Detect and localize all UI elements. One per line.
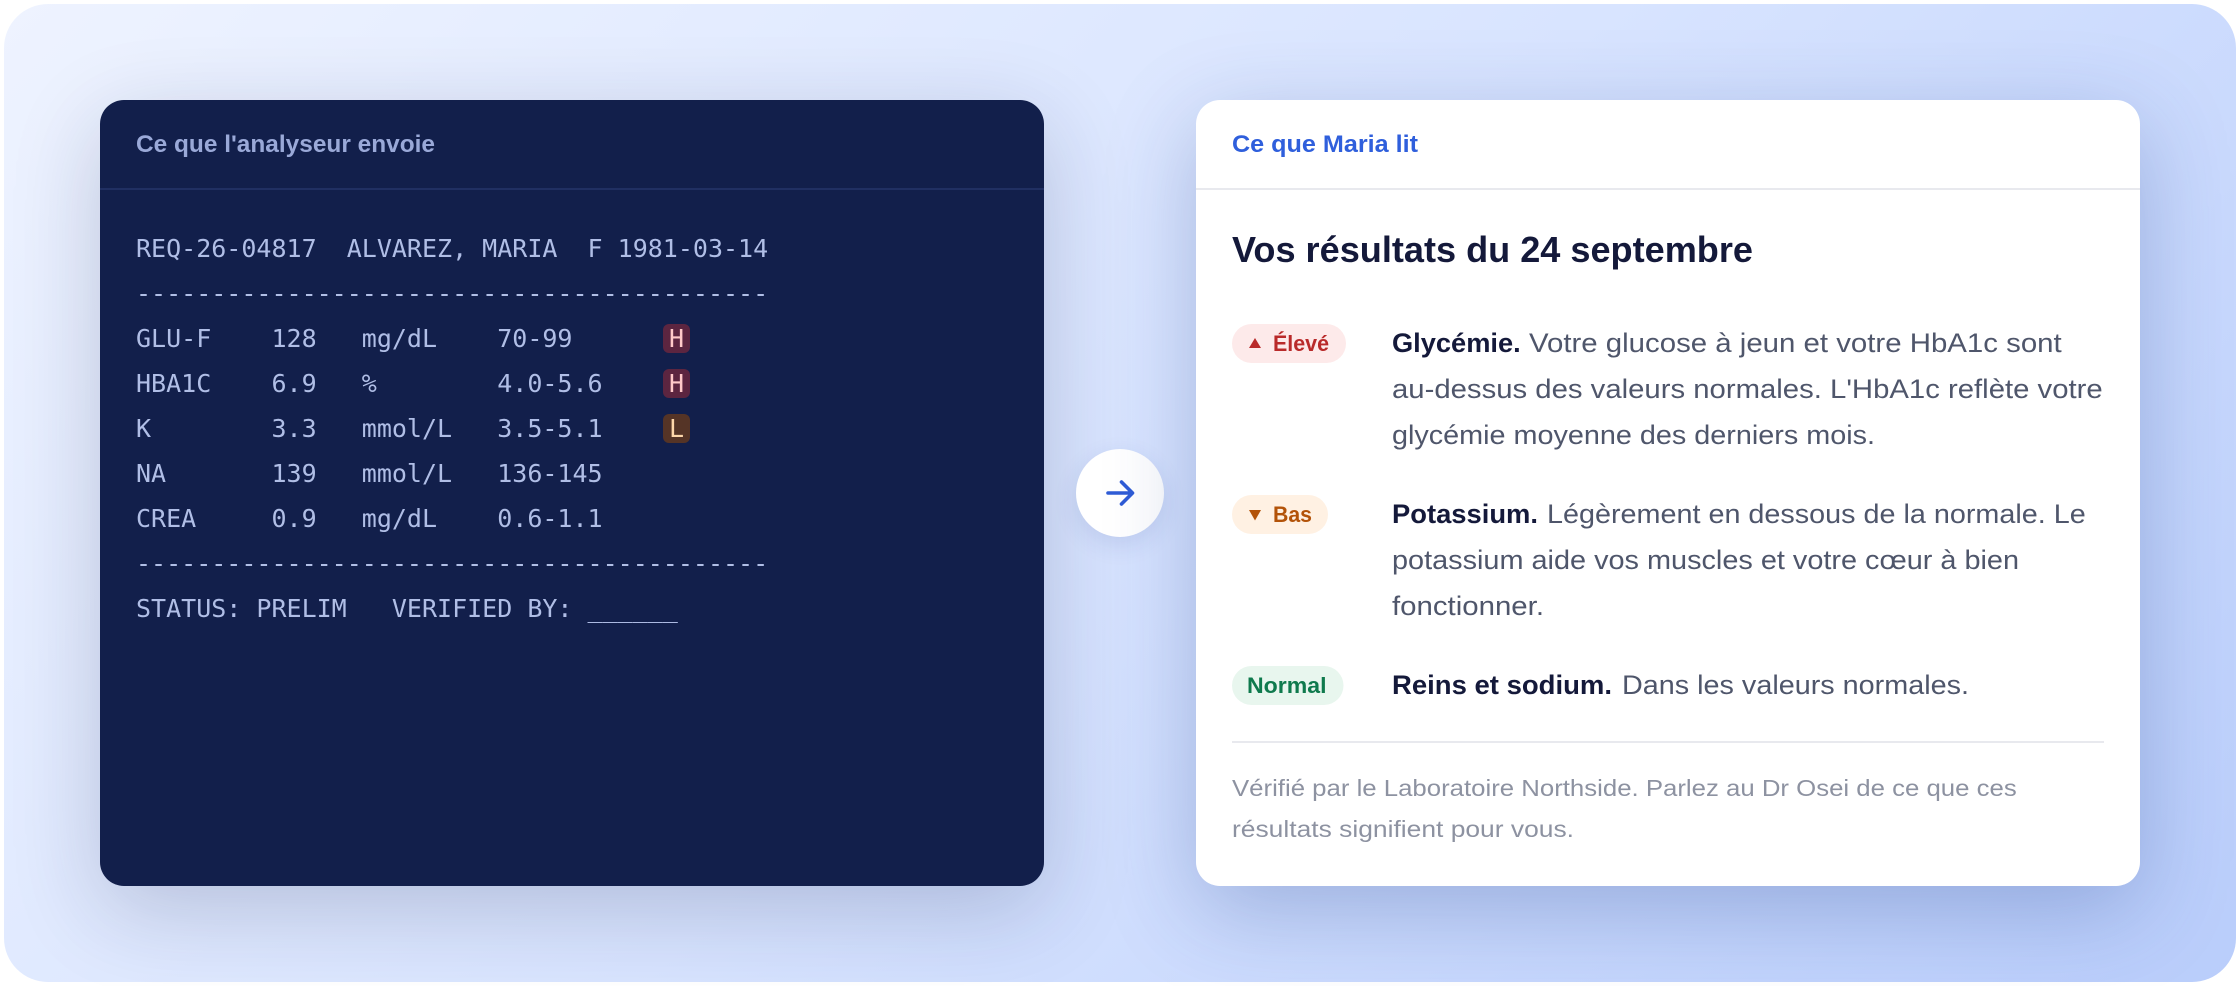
badge: high	[1232, 324, 1346, 363]
badge: low	[1232, 495, 1328, 534]
raw lab report text: GLU-F 128 mg/dL 70-99	[136, 324, 572, 353]
explanation: potassium: Potassium.	[1392, 499, 1538, 529]
explanation: glycemia: Glycémie.	[1392, 328, 1521, 358]
footer note	[1232, 775, 2017, 842]
flag: glucose high: H	[669, 324, 684, 353]
explanation: kidneys and sodium: Dans les valeurs normales.	[1622, 670, 1969, 700]
badge: normal: Normal	[1247, 673, 1326, 698]
panel: what Maria reads	[1196, 100, 2140, 886]
heading: Maria: Ce que Maria lit	[1232, 131, 1418, 158]
explanation: kidneys and sodium	[1392, 670, 1969, 700]
raw lab report text: REQ-26-04817 ALVAREZ, MARIA F 1981-03-14	[136, 234, 768, 263]
badge: high: Élevé	[1273, 331, 1329, 356]
explanation: potassium: fonctionner.	[1392, 591, 1544, 621]
raw lab report text: ------------------------------------------	[136, 279, 768, 308]
arrow: from raw report to patient reading	[1076, 449, 1164, 537]
badge: low: Bas	[1273, 502, 1312, 527]
raw lab report text: ------------------------------------------	[136, 549, 768, 578]
flag: potassium low	[663, 414, 690, 443]
raw lab report text: STATUS: PRELIM VERIFIED BY: ______	[136, 594, 679, 623]
footer note: Vérifié par le Laboratoire Northside. Parlez au Dr Osei de ce que ces	[1232, 775, 2017, 801]
explanation: glycemia: Votre glucose à jeun et votre HbA1c sont	[1529, 328, 2062, 358]
panel: what the analyser sends	[100, 100, 1044, 886]
explanation: potassium: Légèrement en dessous de la normale. Le	[1547, 499, 2086, 529]
explanation: potassium	[1392, 499, 2086, 621]
explanation: potassium: potassium aide vos muscles et votre cœur à bien	[1392, 545, 2019, 575]
row: glycemia	[1232, 324, 2103, 450]
raw lab report text: CREA 0.9 mg/dL 0.6-1.1	[136, 504, 603, 533]
explanation: glycemia: au-dessus des valeurs normales. L'HbA1c reflète votre	[1392, 374, 2103, 404]
row: potassium	[1232, 495, 2086, 621]
explanation: glycemia	[1392, 328, 2103, 450]
results title: Vos résultats du 24 septembre	[1232, 229, 1753, 270]
row: kidneys and sodium	[1232, 666, 1969, 705]
flag: potassium low: L	[669, 414, 684, 443]
raw lab report text: HBA1C 6.9 % 4.0-5.6	[136, 369, 603, 398]
badge: normal	[1232, 666, 1344, 705]
flag: glucose high	[663, 324, 690, 353]
explanation: glycemia: glycémie moyenne des derniers mois.	[1392, 420, 1875, 450]
footer note: résultats signifient pour vous.	[1232, 816, 1574, 842]
explanation: kidneys and sodium: Reins et sodium.	[1392, 670, 1612, 700]
heading: analyser: Ce que l'analyseur envoie	[136, 131, 435, 158]
flag: HbA1c high: H	[669, 369, 684, 398]
raw lab report text	[136, 234, 768, 623]
raw lab report text: K 3.3 mmol/L 3.5-5.1	[136, 414, 603, 443]
raw lab report text: NA 139 mmol/L 136-145	[136, 459, 603, 488]
flag: HbA1c high	[663, 369, 690, 398]
